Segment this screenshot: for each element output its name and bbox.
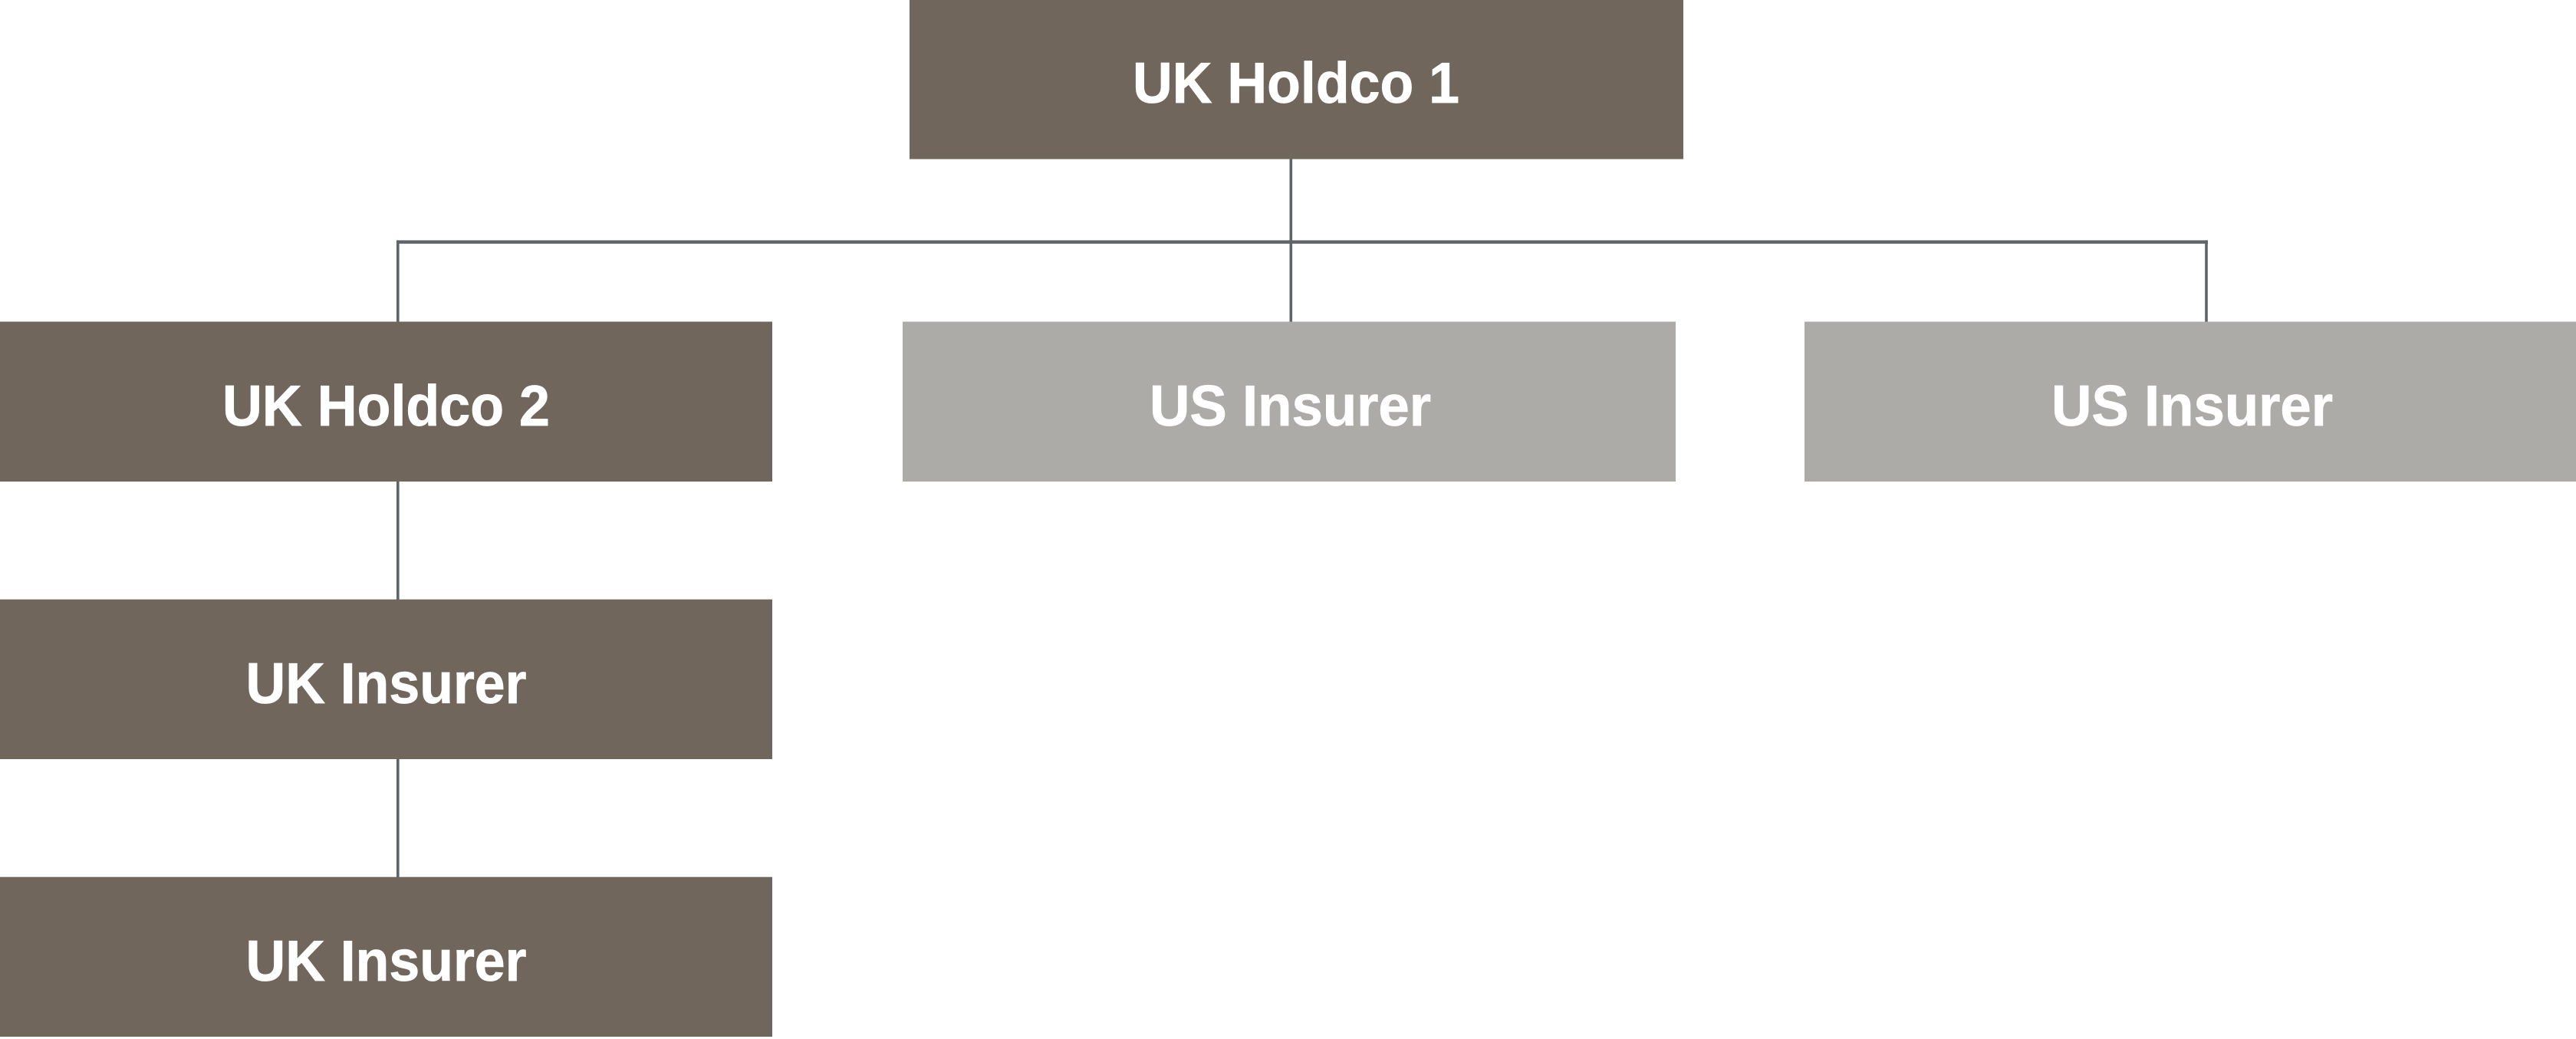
box: US Insurer centre xyxy=(903,322,1676,482)
box: UK Insurer upper: UK Insurer xyxy=(245,651,526,715)
box: UK Holdco 1 xyxy=(910,0,1683,159)
connector: Holdco 1 to second-tier boxes xyxy=(396,159,2208,322)
box: US Insurer centre: US Insurer xyxy=(1150,373,1431,438)
box: US Insurer right: US Insurer xyxy=(2051,373,2333,438)
box: US Insurer right xyxy=(1805,322,2576,482)
box: UK Insurer lower xyxy=(0,877,772,1037)
box: UK Holdco 2 xyxy=(0,322,772,482)
box: UK Holdco 1: UK Holdco 1 xyxy=(1133,51,1459,115)
box: UK Holdco 2: UK Holdco 2 xyxy=(222,373,550,438)
connector: UK Insurer to UK Insurer xyxy=(396,759,400,877)
box: UK Insurer upper xyxy=(0,600,772,759)
connector: Holdco 2 to UK Insurer xyxy=(396,482,400,600)
box: UK Insurer lower: UK Insurer xyxy=(245,929,526,993)
